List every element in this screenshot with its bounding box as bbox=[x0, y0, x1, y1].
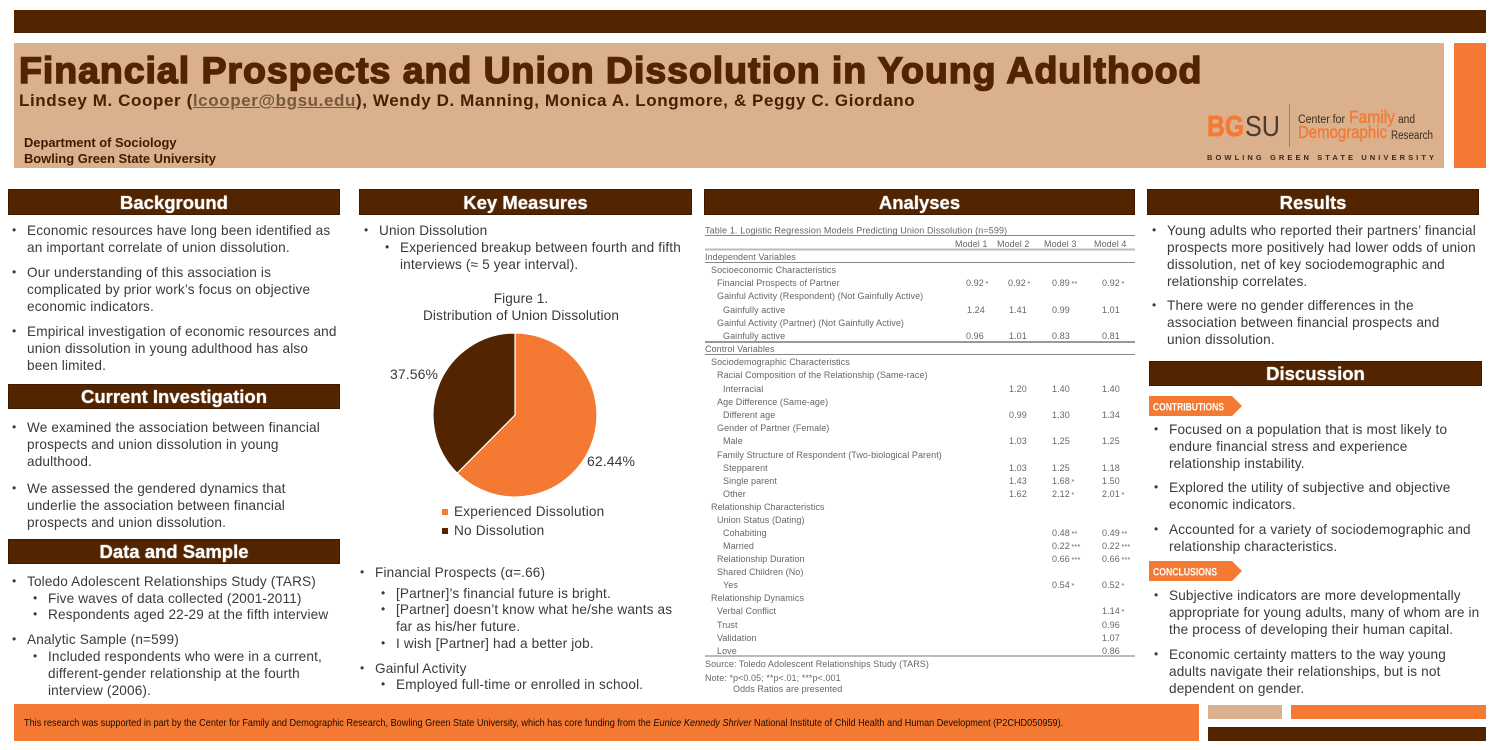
table 1: logistic regression models: Age Difference (Same-age) bbox=[717, 397, 828, 407]
affiliation: Department of Sociology bbox=[24, 135, 177, 150]
table 1: logistic regression models: 1.18 bbox=[1102, 463, 1120, 473]
table 1: logistic regression models: 1.43 bbox=[1009, 476, 1027, 486]
heading: Results bbox=[1147, 189, 1479, 215]
table 1: logistic regression models: Stepparent bbox=[723, 463, 768, 473]
table 1: logistic regression models: 1.40 bbox=[1052, 384, 1070, 394]
data and sample text bbox=[12, 574, 328, 698]
table 1: logistic regression models: 1.20 bbox=[1009, 384, 1027, 394]
table 1: logistic regression models: 0.92 * bbox=[1008, 278, 1030, 288]
table 1: logistic regression models: 1.01 bbox=[1102, 305, 1120, 315]
conclusions text: adults navigate their relationships, but is not bbox=[1169, 664, 1441, 679]
heading: Current Investigation bbox=[8, 384, 340, 409]
authors: Lindsey M. Cooper (lcooper@bgsu.edu), Wendy D. Manning, Monica A. Longmore, & Peggy C. Giordano bbox=[19, 91, 915, 110]
contributions text: relationship instability. bbox=[1169, 456, 1305, 471]
table 1: logistic regression models: Interracial bbox=[723, 384, 763, 394]
table 1: logistic regression models: Gender of Partner (Female) bbox=[717, 423, 829, 433]
current investigation text: We assessed the gendered dynamics that bbox=[27, 481, 286, 496]
table 1: logistic regression models: Socioeconomic Characteristics bbox=[711, 265, 837, 275]
data and sample text: different-gender relationship at the fourth bbox=[48, 666, 300, 681]
logo: BGSU Center for Family and Demographic Research: Research bbox=[1391, 130, 1433, 142]
table 1: logistic regression models: 0.92 * bbox=[1102, 278, 1124, 288]
table 1: logistic regression models: Relationship Dynamics bbox=[711, 593, 804, 603]
conclusions text bbox=[1154, 588, 1479, 696]
heading: Background bbox=[8, 189, 340, 215]
table 1: logistic regression models: 1.25 bbox=[1052, 463, 1070, 473]
table 1: logistic regression models: Love bbox=[717, 646, 737, 656]
financial prospects and gainful activity measure text: Financial Prospects (α=.66) bbox=[375, 565, 545, 580]
heading: Analyses: Analyses bbox=[879, 192, 960, 213]
tag: conclusions: CONCLUSIONS bbox=[1153, 566, 1217, 578]
conclusions text: the process of developing their human capital. bbox=[1169, 622, 1453, 637]
contributions text: Explored the utility of subjective and objective bbox=[1169, 480, 1450, 495]
table 1: logistic regression models: Model 2 bbox=[997, 239, 1030, 249]
heading: Current Investigation: Current Investigation bbox=[81, 386, 267, 407]
table 1: logistic regression models: Married bbox=[723, 541, 754, 551]
conclusions text: appropriate for young adults, many of whom are in bbox=[1169, 605, 1479, 620]
background text: economic indicators. bbox=[27, 299, 154, 314]
legend: No Dissolution bbox=[454, 523, 544, 538]
background text: complicated by prior work’s focus on objective bbox=[27, 282, 310, 297]
table 1: logistic regression models: 0.52 * bbox=[1102, 580, 1124, 590]
heading: Discussion: Discussion bbox=[1266, 363, 1365, 384]
table 1: logistic regression models: 1.30 bbox=[1052, 410, 1070, 420]
table 1: logistic regression models: Gainfully active bbox=[723, 331, 785, 341]
table 1: logistic regression models: 1.34 bbox=[1102, 410, 1120, 420]
current investigation text bbox=[12, 420, 320, 530]
background text bbox=[12, 223, 337, 373]
logo: BGSU Center for Family and Demographic Research: BG bbox=[1207, 111, 1244, 143]
table 1: logistic regression models: 1.24 bbox=[967, 305, 985, 315]
heading: Background: Background bbox=[120, 192, 228, 213]
table 1: logistic regression models: Different age bbox=[723, 410, 775, 420]
table 1: logistic regression models: 0.66 *** bbox=[1052, 554, 1080, 564]
financial prospects and gainful activity measure text: Gainful Activity bbox=[375, 661, 467, 676]
background text: union dissolution in young adulthood has also bbox=[27, 341, 308, 356]
table 1: logistic regression models: 2.01 * bbox=[1102, 489, 1124, 499]
table 1: logistic regression models: 0.54 * bbox=[1052, 580, 1074, 590]
footer orange block bbox=[1291, 705, 1486, 719]
table 1: logistic regression models: Relationship Duration bbox=[717, 554, 805, 564]
conclusions text: dependent on gender. bbox=[1169, 681, 1304, 696]
affiliation: Bowling Green State University bbox=[24, 150, 216, 166]
table 1: logistic regression models: 2.12 * bbox=[1052, 489, 1074, 499]
heading: Data and Sample: Data and Sample bbox=[99, 541, 249, 562]
table 1: logistic regression models: 1.07 bbox=[1102, 633, 1120, 643]
table 1: logistic regression models: Note: *p<0.05; **p<.01; ***p<.001 bbox=[705, 673, 841, 683]
table 1: logistic regression models: Racial Composition of the Relationship (Same-race) bbox=[717, 370, 928, 380]
background text: Empirical investigation of economic resources and bbox=[27, 324, 337, 339]
union dissolution measure text bbox=[364, 223, 681, 272]
heading: Key Measures: Key Measures bbox=[463, 192, 588, 213]
label 37.56%: 37.56% bbox=[390, 366, 438, 382]
table 1: logistic regression models: Table 1. Logistic Regression Models Predicting Union Dissolution (n=599) bbox=[705, 226, 1007, 236]
data and sample text: Respondents aged 22-29 at the fifth interview bbox=[48, 607, 328, 622]
data and sample text: Five waves of data collected (2001-2011) bbox=[48, 591, 302, 606]
current investigation text: We examined the association between financial bbox=[27, 420, 320, 435]
table 1: logistic regression models: 1.25 bbox=[1052, 436, 1070, 446]
contributions text: economic indicators. bbox=[1169, 497, 1296, 512]
table 1: logistic regression models: 1.03 bbox=[1009, 463, 1027, 473]
table 1: logistic regression models: Verbal Conflict bbox=[717, 606, 777, 616]
table 1: logistic regression models: 0.96 bbox=[1102, 620, 1120, 630]
table 1: logistic regression models: 0.89 ** bbox=[1052, 278, 1077, 288]
heading: Results: Results bbox=[1280, 192, 1346, 213]
union dissolution measure text: Experienced breakup between fourth and fifth bbox=[400, 240, 681, 255]
table 1: logistic regression models: 0.22 *** bbox=[1052, 541, 1080, 551]
funding note: This research was supported in part by the Center for Family and Demographic Research, Bowling Green State University, which has core funding from the Eunice Kennedy Shriver National Institute of Child Health and Human Development (P2CHD050959). bbox=[24, 717, 1063, 729]
pie bbox=[434, 334, 596, 496]
financial prospects and gainful activity measure text bbox=[360, 565, 672, 692]
footer dark block bbox=[1208, 727, 1486, 741]
table 1: logistic regression models: 1.68 * bbox=[1052, 476, 1074, 486]
table 1: logistic regression models: Model 3 bbox=[1044, 239, 1077, 249]
table 1: logistic regression models: 1.14 * bbox=[1102, 606, 1124, 616]
table 1: logistic regression models: Shared Children (No) bbox=[717, 567, 803, 577]
current investigation text: prospects and union dissolution. bbox=[27, 515, 226, 530]
table 1: logistic regression models: Control Variables bbox=[705, 344, 775, 354]
contributions text: Focused on a population that is most likely to bbox=[1169, 422, 1447, 437]
table 1: logistic regression models: Yes bbox=[723, 580, 738, 590]
contributions text: Accounted for a variety of sociodemographic and bbox=[1169, 522, 1471, 537]
figure title: Distribution of Union Dissolution bbox=[423, 308, 619, 323]
table 1: logistic regression models: Single parent bbox=[723, 476, 777, 486]
table 1: logistic regression models: 1.25 bbox=[1102, 436, 1120, 446]
financial prospects and gainful activity measure text: far as his/her future. bbox=[396, 619, 520, 634]
table 1: logistic regression models: Gainful Activity (Partner) (Not Gainfully Active) bbox=[717, 318, 904, 328]
results text: relationship correlates. bbox=[1167, 274, 1307, 289]
logo: BGSU Center for Family and Demographic Research: SU bbox=[1245, 111, 1280, 143]
table 1: logistic regression models: 1.50 bbox=[1102, 476, 1120, 486]
heading: Discussion bbox=[1149, 361, 1482, 386]
financial prospects and gainful activity measure text: I wish [Partner] had a better job. bbox=[396, 636, 594, 651]
table 1: logistic regression models: Union Status (Dating) bbox=[717, 515, 805, 525]
table 1: logistic regression models: 1.41 bbox=[1009, 305, 1027, 315]
tag: conclusions bbox=[1149, 561, 1242, 581]
table 1: logistic regression models: Male bbox=[723, 436, 743, 446]
current investigation text: underlie the association between financial bbox=[27, 498, 285, 513]
table 1: logistic regression models: 1.01 bbox=[1009, 331, 1027, 341]
background text: an important correlate of union dissolution. bbox=[27, 240, 290, 255]
table 1: logistic regression models: 0.83 bbox=[1052, 331, 1070, 341]
legend bbox=[442, 504, 604, 538]
logo: BGSU Center for Family and Demographic Research: Center for bbox=[1298, 114, 1345, 126]
table 1: logistic regression models: Cohabiting bbox=[723, 528, 767, 538]
table 1: logistic regression models: Validation bbox=[717, 633, 757, 643]
table 1: logistic regression models: 0.81 bbox=[1102, 331, 1120, 341]
table 1: logistic regression models: Family Structure of Respondent (Two-biological Parent) bbox=[717, 450, 942, 460]
background text: Our understanding of this association is bbox=[27, 265, 271, 280]
footer acknowledgement band bbox=[14, 704, 1199, 741]
table 1: logistic regression models: 0.49 ** bbox=[1102, 528, 1127, 538]
table 1: logistic regression models: 0.66 *** bbox=[1102, 554, 1130, 564]
union dissolution measure text: interviews (≈ 5 year interval). bbox=[400, 257, 578, 272]
top bar bbox=[14, 10, 1486, 33]
conclusions text: Economic certainty matters to the way young bbox=[1169, 647, 1446, 662]
label 62.44%: 62.44% bbox=[587, 453, 635, 469]
logo: BGSU Center for Family and Demographic Research: Demographic bbox=[1298, 122, 1387, 142]
results text: Young adults who reported their partners’ financial bbox=[1167, 223, 1476, 238]
title: Financial Prospects and Union Dissolution in Young Adulthood bbox=[19, 49, 1202, 91]
logo: BGSU Center for Family and Demographic Research bbox=[1207, 104, 1434, 162]
data and sample text: interview (2006). bbox=[48, 683, 151, 698]
data and sample text: Included respondents who were in a current, bbox=[48, 649, 322, 664]
table 1: logistic regression models: Gainful Activity (Respondent) (Not Gainfully Active) bbox=[717, 291, 923, 301]
financial prospects and gainful activity measure text: Employed full-time or enrolled in school. bbox=[396, 677, 643, 692]
results text: prospects more positively had lower odds of union bbox=[1167, 240, 1476, 255]
financial prospects and gainful activity measure text: [Partner] doesn’t know what he/she wants as bbox=[396, 602, 672, 617]
table 1: logistic regression models: Gainfully active bbox=[723, 305, 785, 315]
contributions text: relationship characteristics. bbox=[1169, 539, 1337, 554]
table 1: logistic regression models: Model 4 bbox=[1094, 239, 1127, 249]
results text: There were no gender differences in the bbox=[1167, 298, 1414, 313]
background text: Economic resources have long been identified as bbox=[27, 223, 330, 238]
figure title: Figure 1. bbox=[494, 291, 548, 306]
table 1: logistic regression models: Other bbox=[723, 489, 746, 499]
figure title bbox=[423, 291, 619, 323]
table 1: logistic regression models: Independent Variables bbox=[705, 252, 796, 262]
table 1: logistic regression models: Model 1 bbox=[955, 239, 988, 249]
table 1: logistic regression models: 0.86 bbox=[1102, 646, 1120, 656]
table 1: logistic regression models: 0.48 ** bbox=[1052, 528, 1077, 538]
contributions text: endure financial stress and experience bbox=[1169, 439, 1407, 454]
table 1: logistic regression models: 0.22 *** bbox=[1102, 541, 1130, 551]
legend: Experienced Dissolution bbox=[454, 504, 604, 519]
table 1: logistic regression models: Sociodemographic Characteristics bbox=[711, 357, 850, 367]
financial prospects and gainful activity measure text: [Partner]’s financial future is bright. bbox=[396, 586, 611, 601]
figure 1 pie chart bbox=[390, 291, 635, 538]
table 1: logistic regression models: 1.03 bbox=[1009, 436, 1027, 446]
data and sample text: Analytic Sample (n=599) bbox=[27, 632, 179, 647]
table 1: logistic regression models: Relationship Characteristics bbox=[711, 502, 825, 512]
logo: BGSU Center for Family and Demographic Research: and bbox=[1398, 114, 1415, 126]
footer tan block bbox=[1208, 705, 1282, 719]
affiliation bbox=[24, 135, 216, 166]
table 1: logistic regression models: Odds Ratios are presented bbox=[733, 684, 842, 694]
orange header block bbox=[1454, 43, 1486, 168]
results text: union dissolution. bbox=[1167, 332, 1275, 347]
data and sample text: Toledo Adolescent Relationships Study (TARS) bbox=[27, 574, 316, 589]
header band bbox=[14, 43, 1444, 168]
conclusions text: Subjective indicators are more developmentally bbox=[1169, 588, 1461, 603]
heading: Key Measures bbox=[359, 189, 692, 215]
table 1: logistic regression models: Source: Toledo Adolescent Relationships Study (TARS) bbox=[705, 659, 929, 669]
current investigation text: adulthood. bbox=[27, 454, 92, 469]
logo: BGSU Center for Family and Demographic Research: BOWLING GREEN STATE UNIVERSITY bbox=[1207, 153, 1434, 162]
results text: association between financial prospects and bbox=[1167, 315, 1439, 330]
table 1: logistic regression models: 1.62 bbox=[1009, 489, 1027, 499]
logo: BGSU Center for Family and Demographic Research: Family bbox=[1349, 107, 1395, 127]
table 1: logistic regression models: 0.92 * bbox=[966, 278, 988, 288]
results text: dissolution, net of key sociodemographic and bbox=[1167, 257, 1445, 272]
heading: Analyses bbox=[704, 189, 1135, 215]
tag: contributions: CONTRIBUTIONS bbox=[1153, 402, 1224, 414]
table 1: logistic regression models: 1.40 bbox=[1102, 384, 1120, 394]
table 1: logistic regression models: 0.96 bbox=[966, 331, 984, 341]
current investigation text: prospects and union dissolution in young bbox=[27, 437, 279, 452]
table 1: logistic regression models: Trust bbox=[717, 620, 738, 630]
heading: Data and Sample bbox=[8, 539, 340, 564]
table 1: logistic regression models: Financial Prospects of Partner bbox=[717, 278, 840, 288]
background text: been limited. bbox=[27, 358, 106, 373]
table 1: logistic regression models: 0.99 bbox=[1052, 305, 1070, 315]
tag: contributions bbox=[1149, 396, 1242, 416]
table 1: logistic regression models: 0.99 bbox=[1009, 410, 1027, 420]
results text bbox=[1152, 223, 1476, 347]
union dissolution measure text: Union Dissolution bbox=[379, 223, 487, 238]
contributions text bbox=[1154, 422, 1471, 554]
